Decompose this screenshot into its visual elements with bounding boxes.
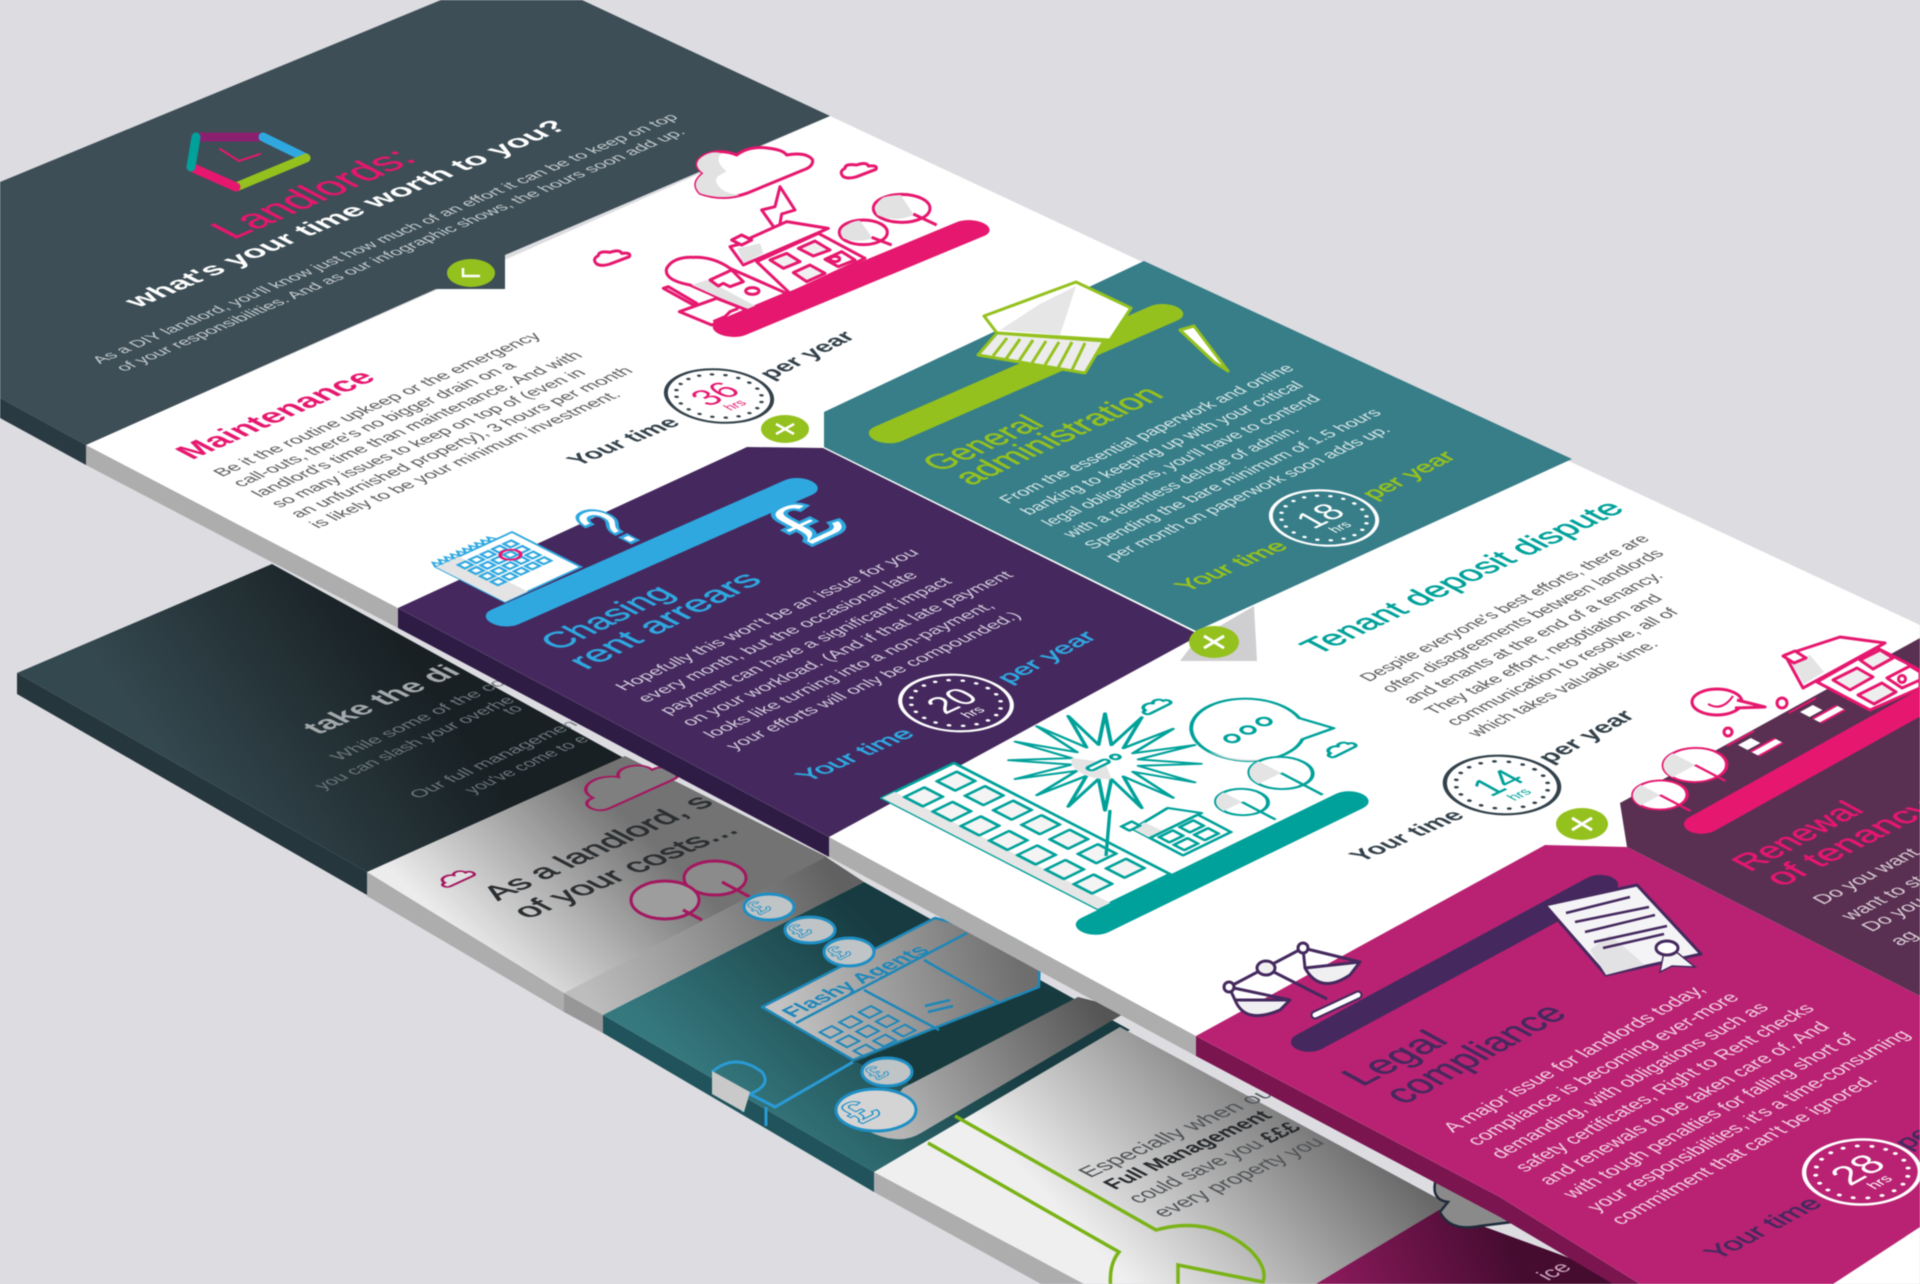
icon: burst star	[969, 693, 1241, 831]
text: admin body: legal obligations, you'll have to contend	[1037, 392, 1325, 529]
label: your time 14 hrs: per year	[1532, 707, 1642, 767]
icon: pound coins	[739, 894, 916, 1131]
icon: shredder	[978, 282, 1131, 373]
label: your time 36 hrs: Your time	[560, 414, 686, 468]
icon: pound sign: £	[743, 490, 870, 555]
panel: general administration	[824, 261, 1572, 631]
text: admin body: Spending the bare minimum of 1.5 hours	[1079, 406, 1386, 551]
label: your time 20 hrs: Your time	[789, 725, 921, 784]
text: legal body: A major issue for landlords today,	[1438, 982, 1711, 1135]
heading: Chasing rent arrears	[527, 552, 776, 674]
panel: dark magenta footer: ice	[1530, 1258, 1577, 1283]
text: legal body: commitment that can't be ignored.	[1606, 1072, 1883, 1228]
text: admin body: with a relentless deluge of admin.	[1057, 423, 1304, 541]
label: your time 36 hrs: 36	[682, 377, 749, 411]
panel: lower dark header: Our full management	[405, 715, 588, 801]
panel: lower dark header: you've come to e	[460, 733, 593, 796]
text: full management copy: Especially when ou	[1072, 1085, 1280, 1180]
text: legal body: demanding, with obligations such as	[1486, 1000, 1774, 1162]
panel: lower dark header: to	[498, 702, 527, 717]
text: admin body	[994, 361, 1407, 563]
label: your time 20 hrs: hrs	[957, 704, 988, 720]
heading: Chasing rent arrears: Chasing	[531, 580, 684, 655]
panel: legal compliance	[1196, 845, 1920, 1284]
icon: wrench outline	[928, 1116, 1264, 1284]
label: your time 18 hrs	[1168, 447, 1462, 594]
text: tenant body: communication to resolve, all of	[1441, 605, 1684, 728]
label: your time 36 hrs: per year	[752, 327, 861, 382]
icon: flats, burst, speech bubble	[882, 682, 1357, 925]
text: maintenance body: Be it the routine upkeep or the emergency	[209, 330, 546, 479]
label: your time 14 hrs: hrs	[1504, 787, 1536, 803]
text: chasing body: your efforts will only be compounded.)	[721, 609, 1026, 752]
icon: small cloud right	[841, 164, 876, 178]
text: maintenance body: an unfurnished property), 3 hours per month	[285, 364, 638, 520]
icon: pen	[1180, 326, 1228, 371]
text: legal body: with tough penalties for falling short of	[1557, 1030, 1863, 1202]
label: your time 18 hrs: Your time	[1168, 537, 1294, 594]
text: legal body: and renewals to be taken care of. And	[1534, 1019, 1835, 1188]
icon: calendar	[430, 529, 581, 602]
label: your time 18 hrs: 18	[1287, 499, 1354, 534]
text: maintenance body: landlord's time than maintenance. And with	[247, 349, 587, 500]
heading: General administration: General	[913, 411, 1053, 476]
chart: dark shop base and grey box	[856, 987, 1130, 1139]
icon: speech bubble	[1168, 682, 1334, 774]
text: intro: of your responsibilities. And as our infographic shows, the hours soon add up.	[112, 127, 690, 374]
label: your time 20 hrs: per year	[990, 628, 1102, 686]
panel: chasing rent arrears	[398, 447, 1200, 837]
icon: pound coins: £	[825, 1094, 893, 1129]
icon: question mark: ?	[552, 497, 667, 557]
text: maintenance body: is likely to be your minimum investment.	[305, 388, 626, 531]
text: tenant body: which takes valuable time.	[1462, 638, 1663, 740]
panel: lower dark header	[17, 564, 700, 895]
panel: tenant deposit dispute	[882, 496, 1762, 925]
lower sheet: take the difference infographic	[17, 564, 1640, 1284]
text: legal body	[1437, 948, 1920, 1228]
icon: pound coins: £	[780, 920, 820, 941]
bar: legal	[1309, 885, 1600, 1042]
text: tenant body: Despite everyone's best efforts, there are	[1355, 532, 1654, 684]
panel: full management saving	[874, 1027, 1450, 1284]
text: admin body: From the essential paperwork and online	[995, 362, 1299, 506]
text: full management copy	[1072, 1085, 1330, 1220]
icon: pound coins: £	[739, 897, 779, 918]
text: legal body: your responsibilities, it's a time-consuming	[1582, 1027, 1916, 1215]
icon: dome and paint tin	[663, 257, 787, 325]
text: tenant body: and tenants at the end of a tenancy.	[1398, 569, 1668, 706]
label: your time 28 hrs: Your time	[1697, 1193, 1829, 1263]
icon: shop front: Flashy Agents	[776, 942, 935, 1020]
label: your time 28 hrs: 28	[1821, 1149, 1896, 1191]
text: maintenance body: so many issues to keep on top of (even in	[266, 366, 590, 510]
panel: lower dark header: While some of the cos	[326, 672, 519, 763]
label: your time 14 hrs: 14	[1461, 764, 1534, 801]
panel: as a landlord, costs	[367, 756, 827, 1012]
icon: renewal house	[1783, 637, 1920, 710]
text: legal body: compliance is becoming ever-more	[1462, 990, 1745, 1149]
heading: what's your time worth to you: what's your time worth to you?	[115, 116, 575, 311]
icon: shop front	[762, 918, 1040, 1060]
icon: small cloud left	[595, 251, 630, 265]
bar: maintenance	[732, 229, 970, 328]
text: chasing body: looks like turning into a non-payment,	[699, 600, 999, 740]
heading: legal compliance: compliance	[1373, 998, 1577, 1109]
icon: pipes and circle outline	[712, 1062, 853, 1126]
text: full management copy: Full Management	[1097, 1107, 1278, 1192]
panel: dark magenta footer	[1316, 1170, 1640, 1284]
text: tenant body	[1354, 532, 1762, 740]
heading: Chasing rent arrears: rent arrears	[559, 567, 771, 674]
shadow notch	[1180, 606, 1257, 661]
text: maintenance body: call-outs, there's no bigger drain on a	[228, 359, 521, 489]
icon: trees	[1205, 750, 1345, 829]
text: full management copy: could save you £££	[1121, 1119, 1307, 1206]
label: your time 20 hrs	[789, 628, 1102, 784]
text: chasing body: Hopefully this won't be an issue for you	[611, 546, 924, 693]
label: your time 14 hrs: Your time	[1343, 807, 1471, 865]
icon: apartment block	[882, 763, 1170, 909]
panel: lower dark header: take the di	[295, 661, 468, 738]
text: tenant body: often disagreements between landlords	[1376, 547, 1669, 695]
text: admin body: banking to keeping up with your critical	[1016, 379, 1308, 517]
text: maintenance body	[209, 323, 657, 531]
icon: certificate document	[1545, 885, 1701, 975]
text: chasing body: on your workload. (And if that late payment	[677, 569, 1018, 729]
panel: lower dark header: you can slash your overhe	[310, 694, 519, 792]
text: intro: As a DIY landlord, you'll know just how much of an effort it can be to keep on top	[88, 112, 683, 366]
text: chasing body: every month, but the occasional late	[633, 569, 922, 705]
text: full management copy: every property you	[1146, 1134, 1330, 1220]
text: chasing body: payment can have a significant impact	[655, 575, 957, 717]
heading: renewal of tenancy: Renewal	[1724, 797, 1872, 876]
text: legal body: safety certificates, Right to Rent checks	[1510, 1001, 1820, 1175]
icon: pound coins: £	[819, 942, 859, 963]
icon: small clouds	[1136, 697, 1357, 758]
icon: house, storm and trees	[595, 147, 937, 325]
panel: header	[0, 0, 830, 465]
icon: lightning bolt	[762, 187, 795, 233]
icon: large cloud	[696, 147, 813, 197]
heading: tenant deposit dispute: Tenant deposit dispute	[1292, 496, 1633, 659]
label: your time 20 hrs: 20	[916, 683, 988, 719]
panel: maintenance	[167, 147, 970, 531]
label: your time 36 hrs: hrs	[720, 397, 750, 412]
text: renewal body	[1806, 845, 1920, 950]
bar: tenant	[1095, 801, 1349, 925]
panel: as a landlord, costs: of your costs...	[504, 819, 746, 922]
band: grey strip	[564, 857, 864, 1033]
heading: General administration: administration	[944, 382, 1173, 490]
panel: renewal of tenancy	[1620, 637, 1920, 996]
label: your time 28 hrs	[1697, 1087, 1920, 1263]
heading: Landlords: Landlords:	[199, 142, 427, 244]
icon: pound coins: £	[857, 1062, 897, 1083]
icon: renewal trees, gates, house	[1622, 637, 1920, 822]
icon: small house	[1122, 800, 1234, 857]
text: tenant body: They take effort, negotiation and	[1420, 592, 1667, 717]
icon: green close button	[1556, 808, 1608, 840]
text: chasing body	[611, 533, 1062, 752]
icon: green tick button	[447, 259, 495, 287]
text: admin body: per month on paperwork soon adds up.	[1101, 423, 1395, 563]
heading: legal compliance: Legal	[1332, 1025, 1458, 1091]
icon: house clock logo	[191, 137, 306, 187]
icon: green close button	[1189, 626, 1239, 658]
label: your time 36 hrs	[560, 327, 861, 468]
label: your time 18 hrs: hrs	[1325, 519, 1355, 535]
icon: green close button	[761, 415, 809, 443]
bar: admin	[888, 313, 1164, 434]
icon: house	[730, 222, 865, 293]
panel: flashy agents	[603, 882, 1130, 1192]
label: your time 14 hrs	[1343, 707, 1642, 865]
bar: chasing	[505, 487, 799, 617]
heading: Maintenance: Maintenance	[167, 366, 384, 463]
icon: scales of justice	[1224, 943, 1360, 1016]
icon: trees	[839, 194, 937, 245]
bar: renewal	[1702, 682, 1920, 824]
label: your time 28 hrs: hrs	[1863, 1173, 1897, 1192]
panel: as a landlord, costs: As a landlord, s	[475, 791, 721, 904]
label: your time 18 hrs: per year	[1355, 447, 1462, 502]
